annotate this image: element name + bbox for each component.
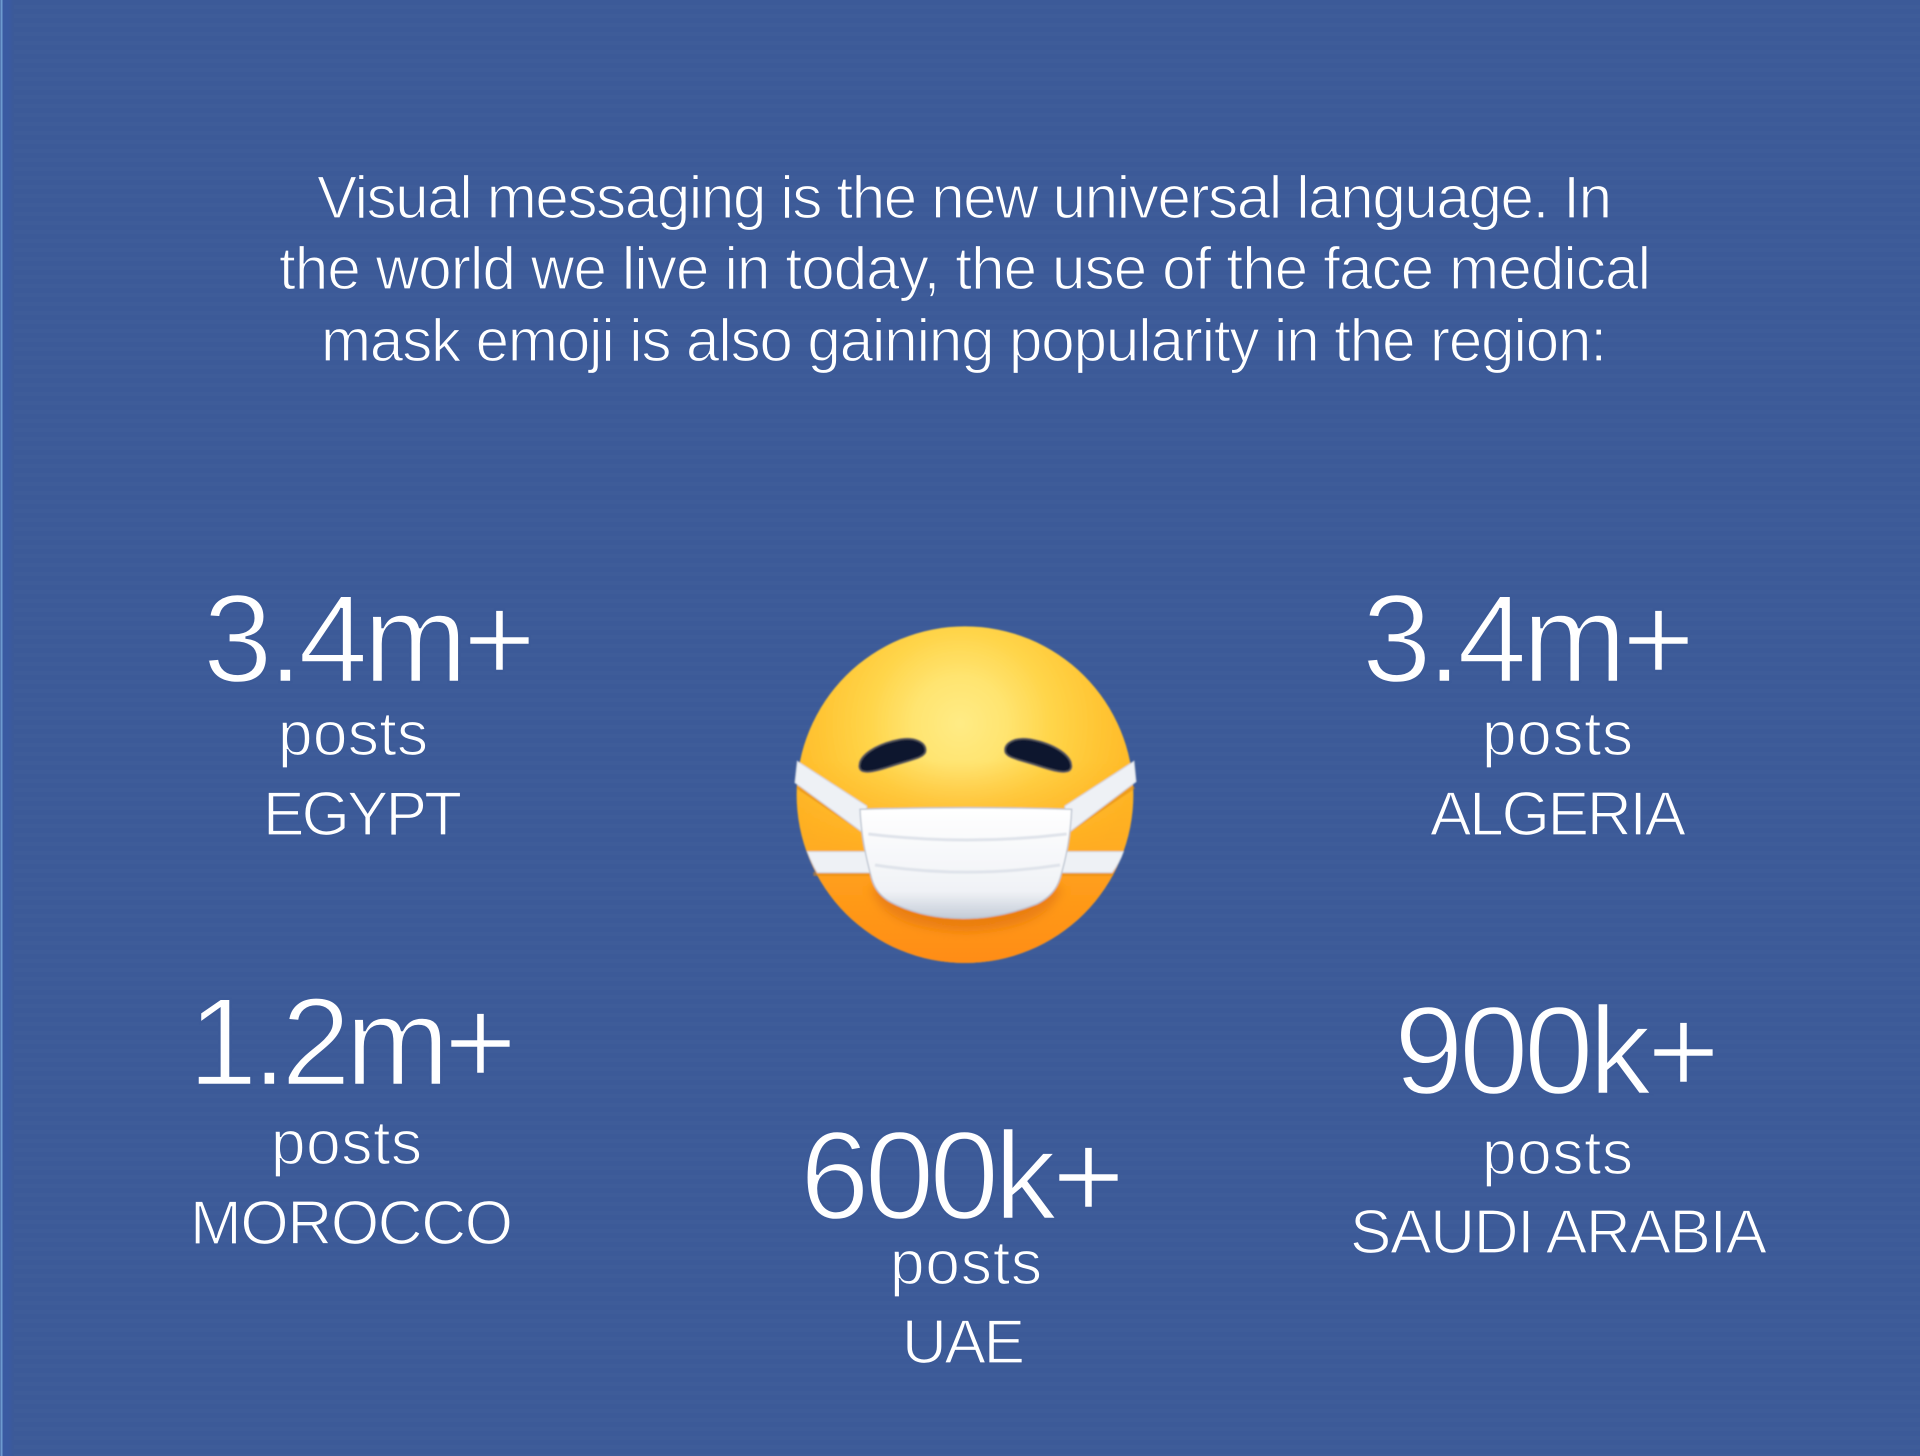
intro text: [279, 164, 1651, 374]
stat: Egypt: [203, 570, 536, 849]
strap shadows: [797, 787, 1134, 874]
stat: Saudi Arabia: SAUDI ARABIA: [1350, 1198, 1768, 1267]
stat: Algeria: [1362, 570, 1695, 849]
stat: Egypt: 3.4m+: [203, 570, 536, 709]
stat: Egypt: posts: [278, 700, 428, 769]
lower face band shading: [798, 770, 1133, 869]
stat: Saudi Arabia: posts: [1482, 1119, 1633, 1188]
icon: face with medical mask emoji: [793, 626, 1137, 967]
face: [797, 626, 1133, 963]
intro text: Visual messaging is the new universal language. In: [317, 164, 1612, 231]
mask shadow: [872, 887, 1062, 932]
stat: UAE: [800, 1107, 1125, 1377]
stat: Egypt: EGYPT: [263, 780, 462, 849]
stat: UAE: 600k+: [800, 1107, 1125, 1246]
stat: UAE: posts: [890, 1229, 1042, 1298]
mask pleats: [868, 834, 1067, 872]
stat: UAE: UAE: [902, 1308, 1025, 1377]
stat: Morocco: 1.2m+: [188, 973, 517, 1112]
stat: Algeria: posts: [1482, 700, 1633, 769]
stat: Algeria: 3.4m+: [1362, 570, 1695, 709]
stat: Saudi Arabia: [1350, 982, 1768, 1267]
intro text: the world we live in today, the use of the face medical: [279, 235, 1651, 302]
eye left: [859, 739, 926, 772]
straps: [795, 761, 1136, 873]
intro text: mask emoji is also gaining popularity in the region:: [321, 307, 1607, 374]
stat: Morocco: posts: [271, 1109, 422, 1178]
stat: Saudi Arabia: 900k+: [1394, 982, 1720, 1121]
eye right: [1005, 739, 1071, 772]
mask: [860, 808, 1072, 918]
stat: Morocco: [188, 973, 517, 1258]
chin shading: [816, 871, 1115, 964]
stat: Morocco: MOROCCO: [190, 1189, 513, 1258]
stat: Algeria: ALGERIA: [1430, 780, 1687, 849]
